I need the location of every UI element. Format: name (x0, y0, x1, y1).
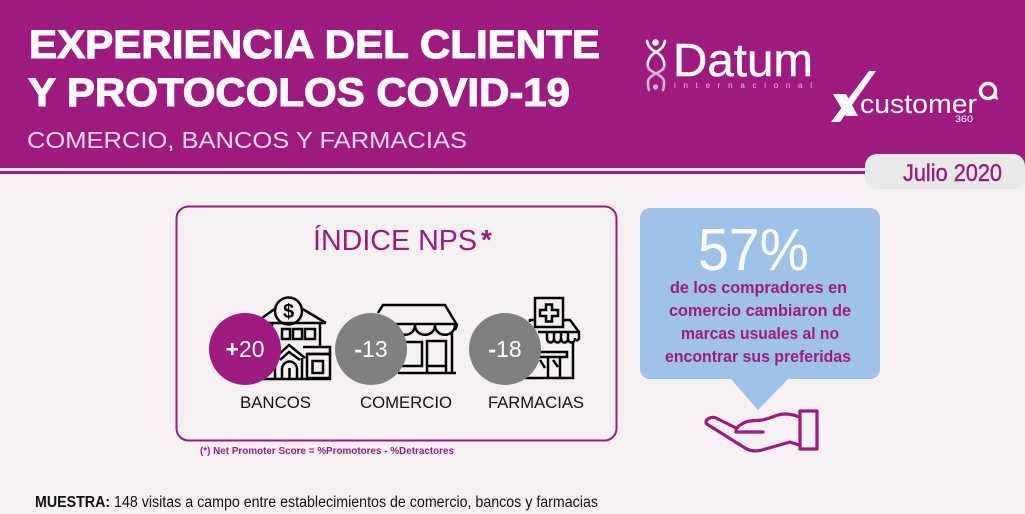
header band (0, 0, 1025, 174)
speech bubble (640, 208, 880, 410)
wordmark: Datum: Datum (673, 34, 813, 86)
callout text: comercio cambiaron de (669, 302, 851, 320)
logo: xcustomer 360 (831, 71, 998, 124)
icon: pharmacy (525, 298, 579, 378)
metric: farmacias -18 (469, 313, 541, 385)
footnote: NPS definition: (*) Net Promoter Score = %Promotores - %Detractores (200, 446, 454, 457)
callout text: de los compradores en (670, 279, 847, 297)
callout text: marcas usuales al no (681, 325, 839, 343)
icon: bank: $ (283, 301, 294, 323)
metric: comercio -13 (335, 313, 407, 385)
subtitle: COMERCIO, BANCOS Y FARMACIAS (27, 127, 467, 153)
label: comercio: COMERCIO (360, 394, 452, 412)
title (28, 23, 600, 115)
icon: dna figure (647, 39, 665, 90)
callout: 57 percent (640, 208, 880, 410)
heading: NPS index: ÍNDICE NPS (313, 224, 477, 257)
callout text: encontrar sus preferidas (665, 348, 851, 366)
icon: x mark (831, 71, 876, 122)
metric: bancos +20 (209, 313, 281, 385)
icon: bank (262, 298, 331, 379)
icon: q speech mark (980, 84, 998, 100)
wordmark: 360: 360 (955, 114, 973, 124)
sample note: MUESTRA: 148 visitas a campo entre establecimientos de comercio, bancos y farmacias (35, 494, 598, 511)
big number: 57% (698, 217, 809, 283)
metric: comercio -13: -13 (354, 336, 388, 362)
label: bancos: BANCOS (240, 394, 311, 412)
title: EXPERIENCIA DEL CLIENTE (29, 23, 600, 67)
icon: store (378, 305, 457, 373)
wordmark: customer: customer (860, 89, 977, 119)
icon: open hand (706, 411, 817, 451)
date pill: Julio 2020 (903, 160, 1002, 187)
wordmark: internacional: internacional (674, 81, 812, 90)
heading: NPS index: * (481, 224, 492, 255)
logo: Datum Internacional (647, 34, 813, 90)
label: farmacias: FARMACIAS (488, 394, 584, 412)
panel: NPS index (176, 206, 616, 440)
metric: bancos +20: +20 (225, 336, 265, 362)
metric: farmacias -18: -18 (488, 336, 522, 362)
callout text (665, 279, 851, 366)
date pill (865, 154, 1025, 189)
title: Y PROTOCOLOS COVID-19 (28, 71, 570, 115)
